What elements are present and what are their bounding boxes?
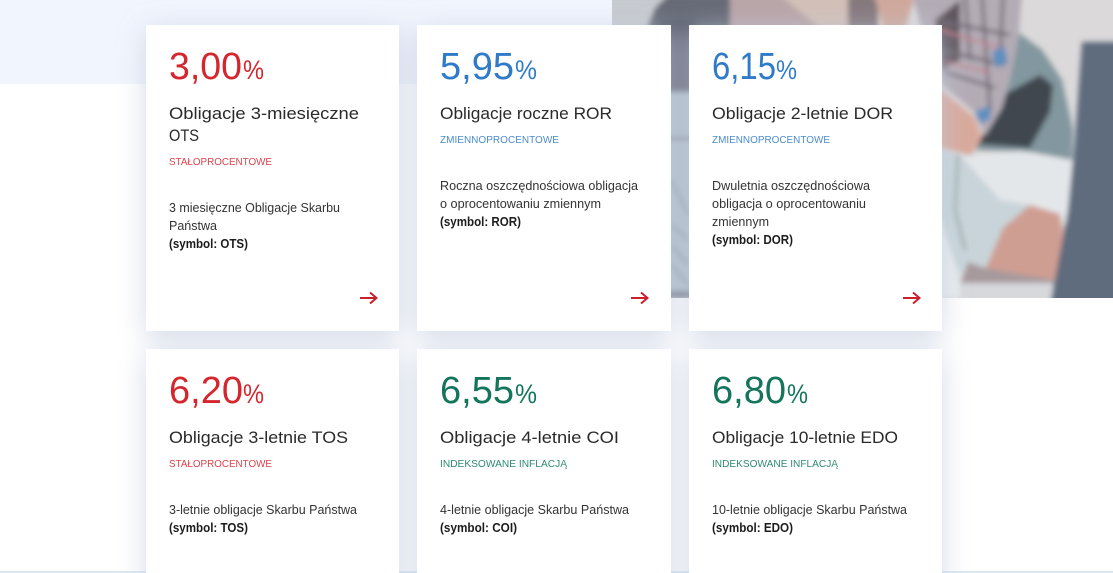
icon: arrow <box>631 292 648 304</box>
tag: INDEKSOWANE INFLACJĄ <box>440 458 568 470</box>
description: Dwuletnia oszczędnościowa <box>712 179 870 193</box>
title: Obligacje roczne ROR <box>440 105 612 123</box>
rate: 3,00 <box>169 46 242 88</box>
rate: 6,20 <box>169 370 243 412</box>
panel: OTS <box>146 25 399 331</box>
description: o oprocentowaniu zmiennym <box>440 197 601 211</box>
description: (symbol: OTS) <box>169 237 248 251</box>
rate: % <box>243 55 264 85</box>
description <box>712 179 870 247</box>
title: OTS <box>169 127 199 145</box>
description: 3-letnie obligacje Skarbu Państwa <box>169 503 357 517</box>
panel: EDO <box>689 349 942 573</box>
title: Obligacje 10-letnie EDO <box>712 429 898 447</box>
description: 10-letnie obligacje Skarbu Państwa <box>712 503 907 517</box>
description <box>440 179 638 229</box>
tag: ZMIENNOPROCENTOWE <box>712 134 830 146</box>
tag: STAŁOPROCENTOWE <box>169 458 272 470</box>
rate: 6,15 <box>712 46 776 88</box>
tag: STAŁOPROCENTOWE <box>169 156 272 168</box>
rate: % <box>515 55 537 85</box>
description: (symbol: ROR) <box>440 215 521 229</box>
rate: % <box>243 379 264 409</box>
rate: % <box>515 379 537 409</box>
description: (symbol: EDO) <box>712 521 793 535</box>
rate: 6,80 <box>712 370 786 412</box>
rate: 5,95 <box>440 46 514 88</box>
title <box>169 105 359 145</box>
description: 4-letnie obligacje Skarbu Państwa <box>440 503 629 517</box>
panel: TOS <box>146 349 399 573</box>
panel: DOR <box>689 25 942 331</box>
tag: INDEKSOWANE INFLACJĄ <box>712 458 839 470</box>
description: (symbol: TOS) <box>169 521 248 535</box>
rate: % <box>776 55 797 85</box>
card shadows <box>146 30 942 573</box>
icon: arrow <box>903 292 920 304</box>
description: (symbol: COI) <box>440 521 517 535</box>
photo: family <box>600 0 1113 305</box>
description: zmiennym <box>712 215 769 229</box>
description <box>440 503 629 535</box>
bottom strip <box>0 571 1113 573</box>
rate: 6,55 <box>440 370 514 412</box>
icon: arrow <box>360 292 376 304</box>
title: Obligacje 2-letnie DOR <box>712 105 893 123</box>
panel: COI <box>417 349 671 573</box>
tag: ZMIENNOPROCENTOWE <box>440 134 559 146</box>
description: obligacja o oprocentowaniu <box>712 197 866 211</box>
rate: % <box>787 379 808 409</box>
title: Obligacje 4-letnie COI <box>440 429 619 447</box>
description: (symbol: DOR) <box>712 233 793 247</box>
background band <box>0 0 612 84</box>
title: Obligacje 3-letnie TOS <box>169 429 348 447</box>
description <box>169 503 357 535</box>
description <box>169 201 340 251</box>
description <box>712 503 907 535</box>
description: Roczna oszczędnościowa obligacja <box>440 179 638 193</box>
description: 3 miesięczne Obligacje Skarbu <box>169 201 340 215</box>
description: Państwa <box>169 219 217 233</box>
title: Obligacje 3-miesięczne <box>169 105 359 123</box>
panel: ROR <box>417 25 671 331</box>
